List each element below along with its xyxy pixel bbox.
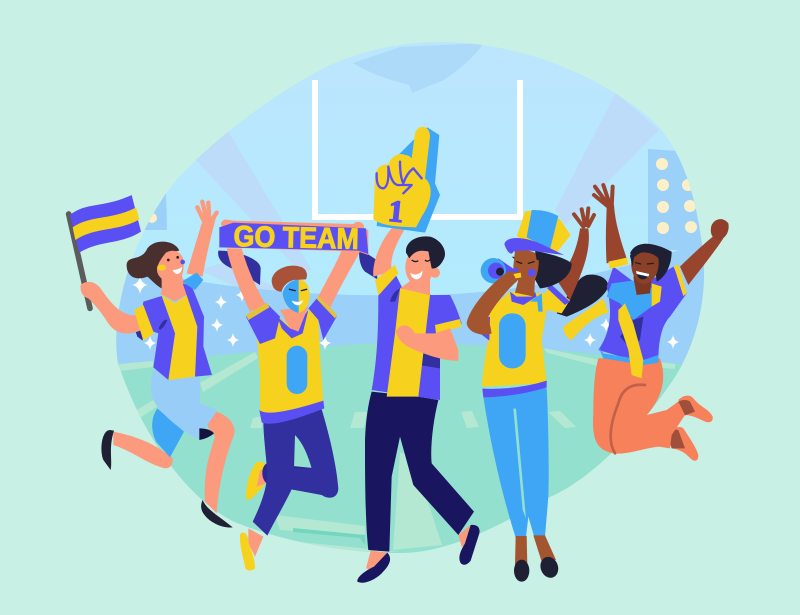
GO TEAM scarf banner: GO TEAM bbox=[233, 220, 359, 256]
shirt with number patch bbox=[482, 283, 570, 397]
raised arm and hand bbox=[557, 208, 594, 300]
shirt bbox=[598, 258, 687, 365]
feet bbox=[667, 396, 713, 461]
front leg and shoe bbox=[201, 412, 235, 527]
raised arms bbox=[227, 248, 360, 312]
orange trousers bbox=[593, 358, 685, 454]
foam finger bbox=[373, 127, 440, 233]
raised arms bbox=[606, 205, 723, 285]
right floodlight bbox=[648, 149, 702, 250]
pants bbox=[253, 409, 338, 536]
arm with horn bbox=[467, 258, 520, 341]
back leg and yellow shoe bbox=[246, 462, 323, 500]
open hand bbox=[594, 185, 613, 207]
yellow sleeve bbox=[134, 305, 154, 341]
long hair behind bbox=[557, 275, 608, 317]
shirt bbox=[372, 265, 462, 400]
yellow streamer and scarf bbox=[563, 280, 662, 378]
stands bbox=[100, 236, 720, 370]
blue pants bbox=[483, 388, 549, 537]
sparkles bbox=[132, 276, 679, 350]
fan 4: woman with horn and hat bbox=[467, 208, 608, 582]
field bbox=[118, 343, 682, 553]
pants bbox=[365, 392, 474, 552]
striped top hat bbox=[504, 210, 571, 255]
scarf drape bbox=[218, 248, 377, 285]
neck and painted face bbox=[272, 266, 309, 332]
shoes and ankles bbox=[357, 525, 480, 583]
field markings bbox=[119, 348, 675, 552]
flag arm bbox=[81, 282, 142, 333]
ankles and shoes bbox=[514, 535, 561, 582]
head with ponytail bbox=[127, 242, 185, 297]
socks bbox=[667, 400, 695, 448]
light beams bbox=[194, 93, 659, 300]
back leg and shoe bbox=[101, 408, 184, 470]
head bbox=[400, 236, 445, 295]
skirt bbox=[151, 370, 217, 440]
panel: stadium scene in oval bbox=[116, 42, 704, 553]
trouser fold bbox=[611, 385, 645, 453]
fist bbox=[711, 219, 729, 240]
left floodlight bbox=[143, 192, 167, 230]
t-shirt with number patch bbox=[246, 296, 337, 424]
torso and jacket bbox=[135, 273, 212, 380]
head with paint bbox=[512, 250, 572, 297]
blimp bbox=[353, 43, 484, 93]
goal posts bbox=[315, 80, 520, 217]
raised arm and hand bbox=[187, 202, 217, 277]
flag bbox=[69, 195, 141, 308]
fan 3: man with foam finger bbox=[357, 127, 480, 583]
fan 5: jumping woman bbox=[563, 185, 729, 461]
fan 2: man holding scarf bbox=[218, 219, 377, 570]
head bbox=[630, 244, 672, 295]
raised arm bbox=[373, 227, 405, 277]
gap between legs bbox=[513, 409, 526, 518]
illustration: cheering sports fans bbox=[66, 42, 729, 583]
bent arm bbox=[396, 325, 458, 361]
lower foot and shoe bbox=[240, 528, 263, 570]
fan 1: woman with flag bbox=[69, 195, 235, 527]
foam finger: 1 bbox=[387, 194, 405, 229]
